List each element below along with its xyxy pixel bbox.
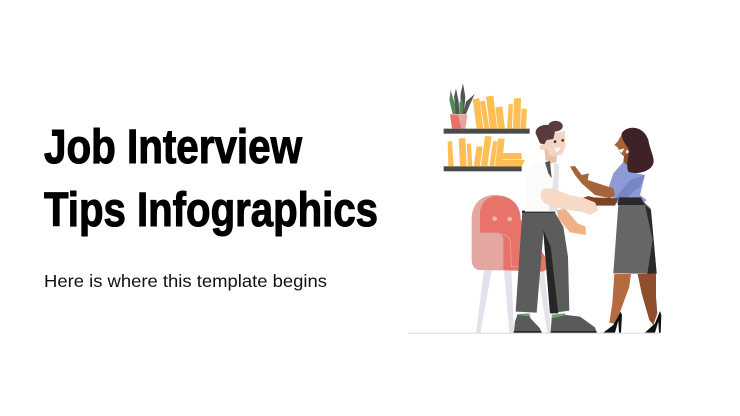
title: Tips Infographics [44,184,378,237]
bookshelves with plant and books [444,83,530,171]
woman legs, skirt and heels [603,200,661,333]
chair seat [480,196,548,272]
shelf: top [444,129,530,134]
illustration: job interview handshake [408,83,661,334]
floor line [408,332,661,334]
man arm in handshake [541,188,598,215]
woman [570,128,661,333]
chair legs [476,269,551,333]
shelf: bottom [444,166,522,171]
man legs and shoes [514,211,597,333]
woman upper body, hair, arm [570,128,654,206]
chair [472,195,551,333]
man lower forearm and hand [557,208,586,235]
man torso, head [525,121,565,212]
books: top row [473,96,527,129]
title [44,121,378,237]
books: bottom row [448,136,525,166]
icon: potted plant [449,83,475,129]
chair back [472,195,548,271]
man [514,121,597,333]
title: Job Interview [44,121,303,174]
subtitle: Here is where this template begins [44,271,327,291]
